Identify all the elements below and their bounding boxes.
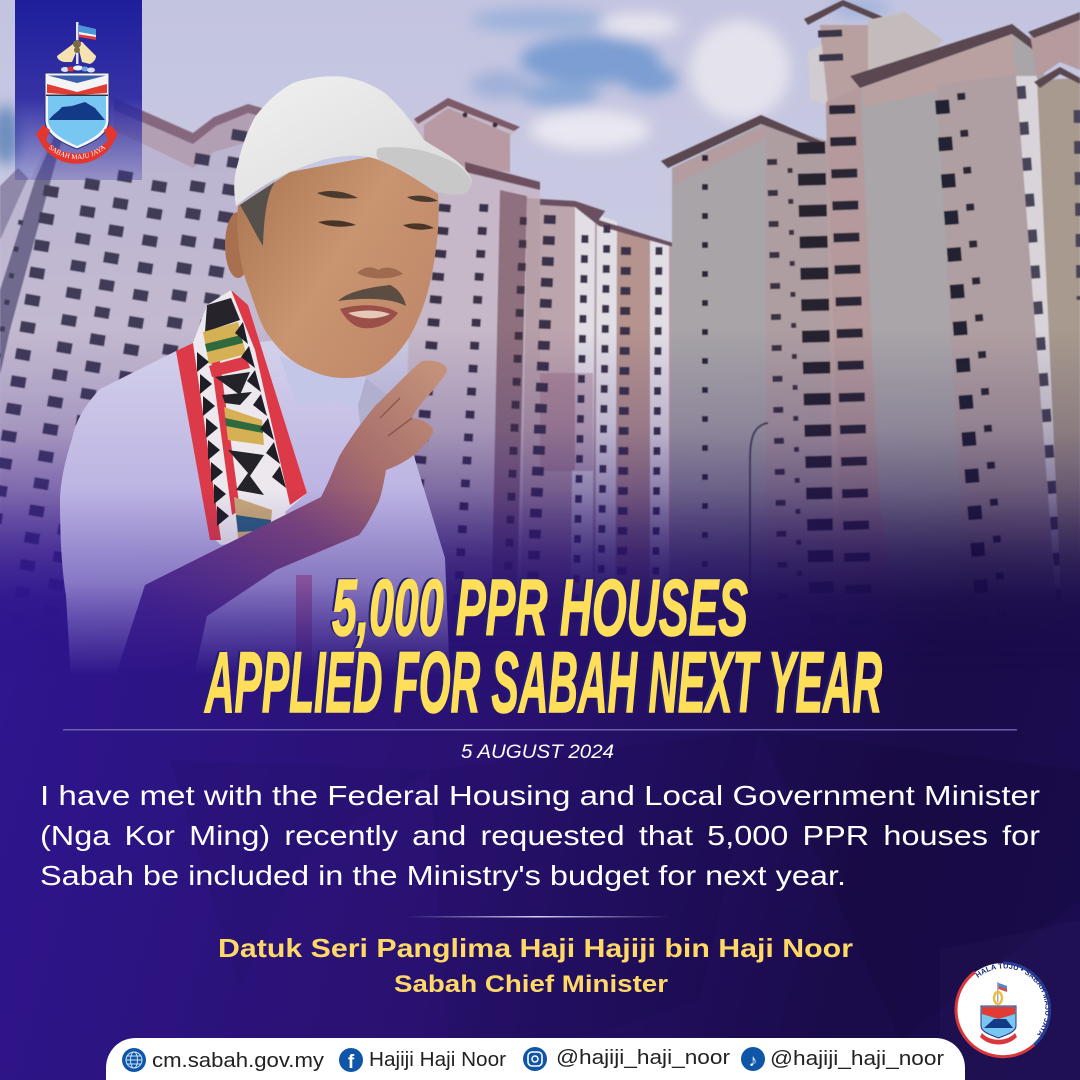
flag and pole: [76, 22, 96, 64]
round badge: HALA TUJU • SABAH MAJU JAYA: [975, 963, 1050, 1036]
attribution divider: [405, 916, 670, 918]
nose shadow: [357, 267, 403, 278]
moustache: [338, 285, 406, 306]
icon: instagram: [523, 1047, 547, 1071]
eyebrows: [317, 191, 438, 202]
logo tab: Sabah state crest: [15, 0, 142, 180]
icon: facebook: f: [348, 1052, 355, 1073]
social media bar: [106, 1038, 965, 1080]
quote paragraph: [40, 780, 1040, 891]
title: 5,000 PPR HOUSES: [332, 563, 748, 652]
waving arm and hand: [114, 361, 447, 680]
purple gradient overlay: [0, 348, 1080, 670]
street lamp: [750, 423, 768, 600]
mouth: [340, 305, 398, 328]
purple fade over portrait: [0, 502, 1080, 680]
quote paragraph: (Nga Kor Ming) recently and requested that 5,000 PPR houses for: [40, 820, 1040, 851]
middle tower block: [400, 98, 540, 680]
five coloured beads: [61, 66, 95, 72]
attribution name: Datuk Seri Panglima Haji Hajiji bin Haji Noor: [218, 933, 853, 963]
collar: [279, 355, 366, 408]
icon: tiktok: [741, 1047, 765, 1071]
quote paragraph: I have met with the Federal Housing and Local Government Minister: [40, 780, 1040, 811]
left tower block: [0, 0, 1080, 680]
low-poly background facets: [170, 730, 1080, 1080]
left tower windows: [0, 130, 240, 680]
right tower block: [672, 122, 766, 680]
ear: [225, 212, 251, 278]
middle-right tower block: [520, 198, 673, 680]
neck and face: [237, 155, 439, 378]
eyes: [318, 220, 434, 230]
shirt and torso: [60, 340, 450, 680]
divider under title: [63, 729, 1017, 730]
icon: globe: [122, 1048, 146, 1072]
portrait of chief minister: [60, 76, 472, 680]
website: cm.sabah.gov.my: [152, 1050, 324, 1072]
facebook name: Hajiji Haji Noor: [369, 1049, 506, 1071]
attribution role: Sabah Chief Minister: [394, 971, 668, 998]
scarf zigzag triangles: [197, 322, 286, 526]
badge crest: [980, 982, 1017, 1044]
shield: [45, 73, 109, 149]
instagram handle: @hajiji_haji_noor: [556, 1047, 730, 1069]
round badge: [954, 962, 1052, 1058]
crest hands holding pole: [57, 40, 96, 64]
icon: tiktok: ♪: [749, 1051, 757, 1070]
icon: facebook: [339, 1048, 363, 1073]
lower scarf strip: [296, 575, 312, 670]
title: [204, 563, 882, 731]
hair at temple: [240, 182, 275, 246]
traditional scarf: [176, 290, 307, 545]
clouds in sky: [0, 0, 890, 165]
white cap: [234, 76, 472, 206]
motto ribbon: SABAH MAJU JAYA: [48, 145, 106, 160]
tiktok handle: @hajiji_haji_noor: [770, 1048, 944, 1070]
date: 5 AUGUST 2024: [461, 742, 614, 763]
motto ribbon: [36, 125, 118, 164]
quote paragraph: Sabah be included in the Ministry's budget for next year.: [40, 860, 846, 891]
